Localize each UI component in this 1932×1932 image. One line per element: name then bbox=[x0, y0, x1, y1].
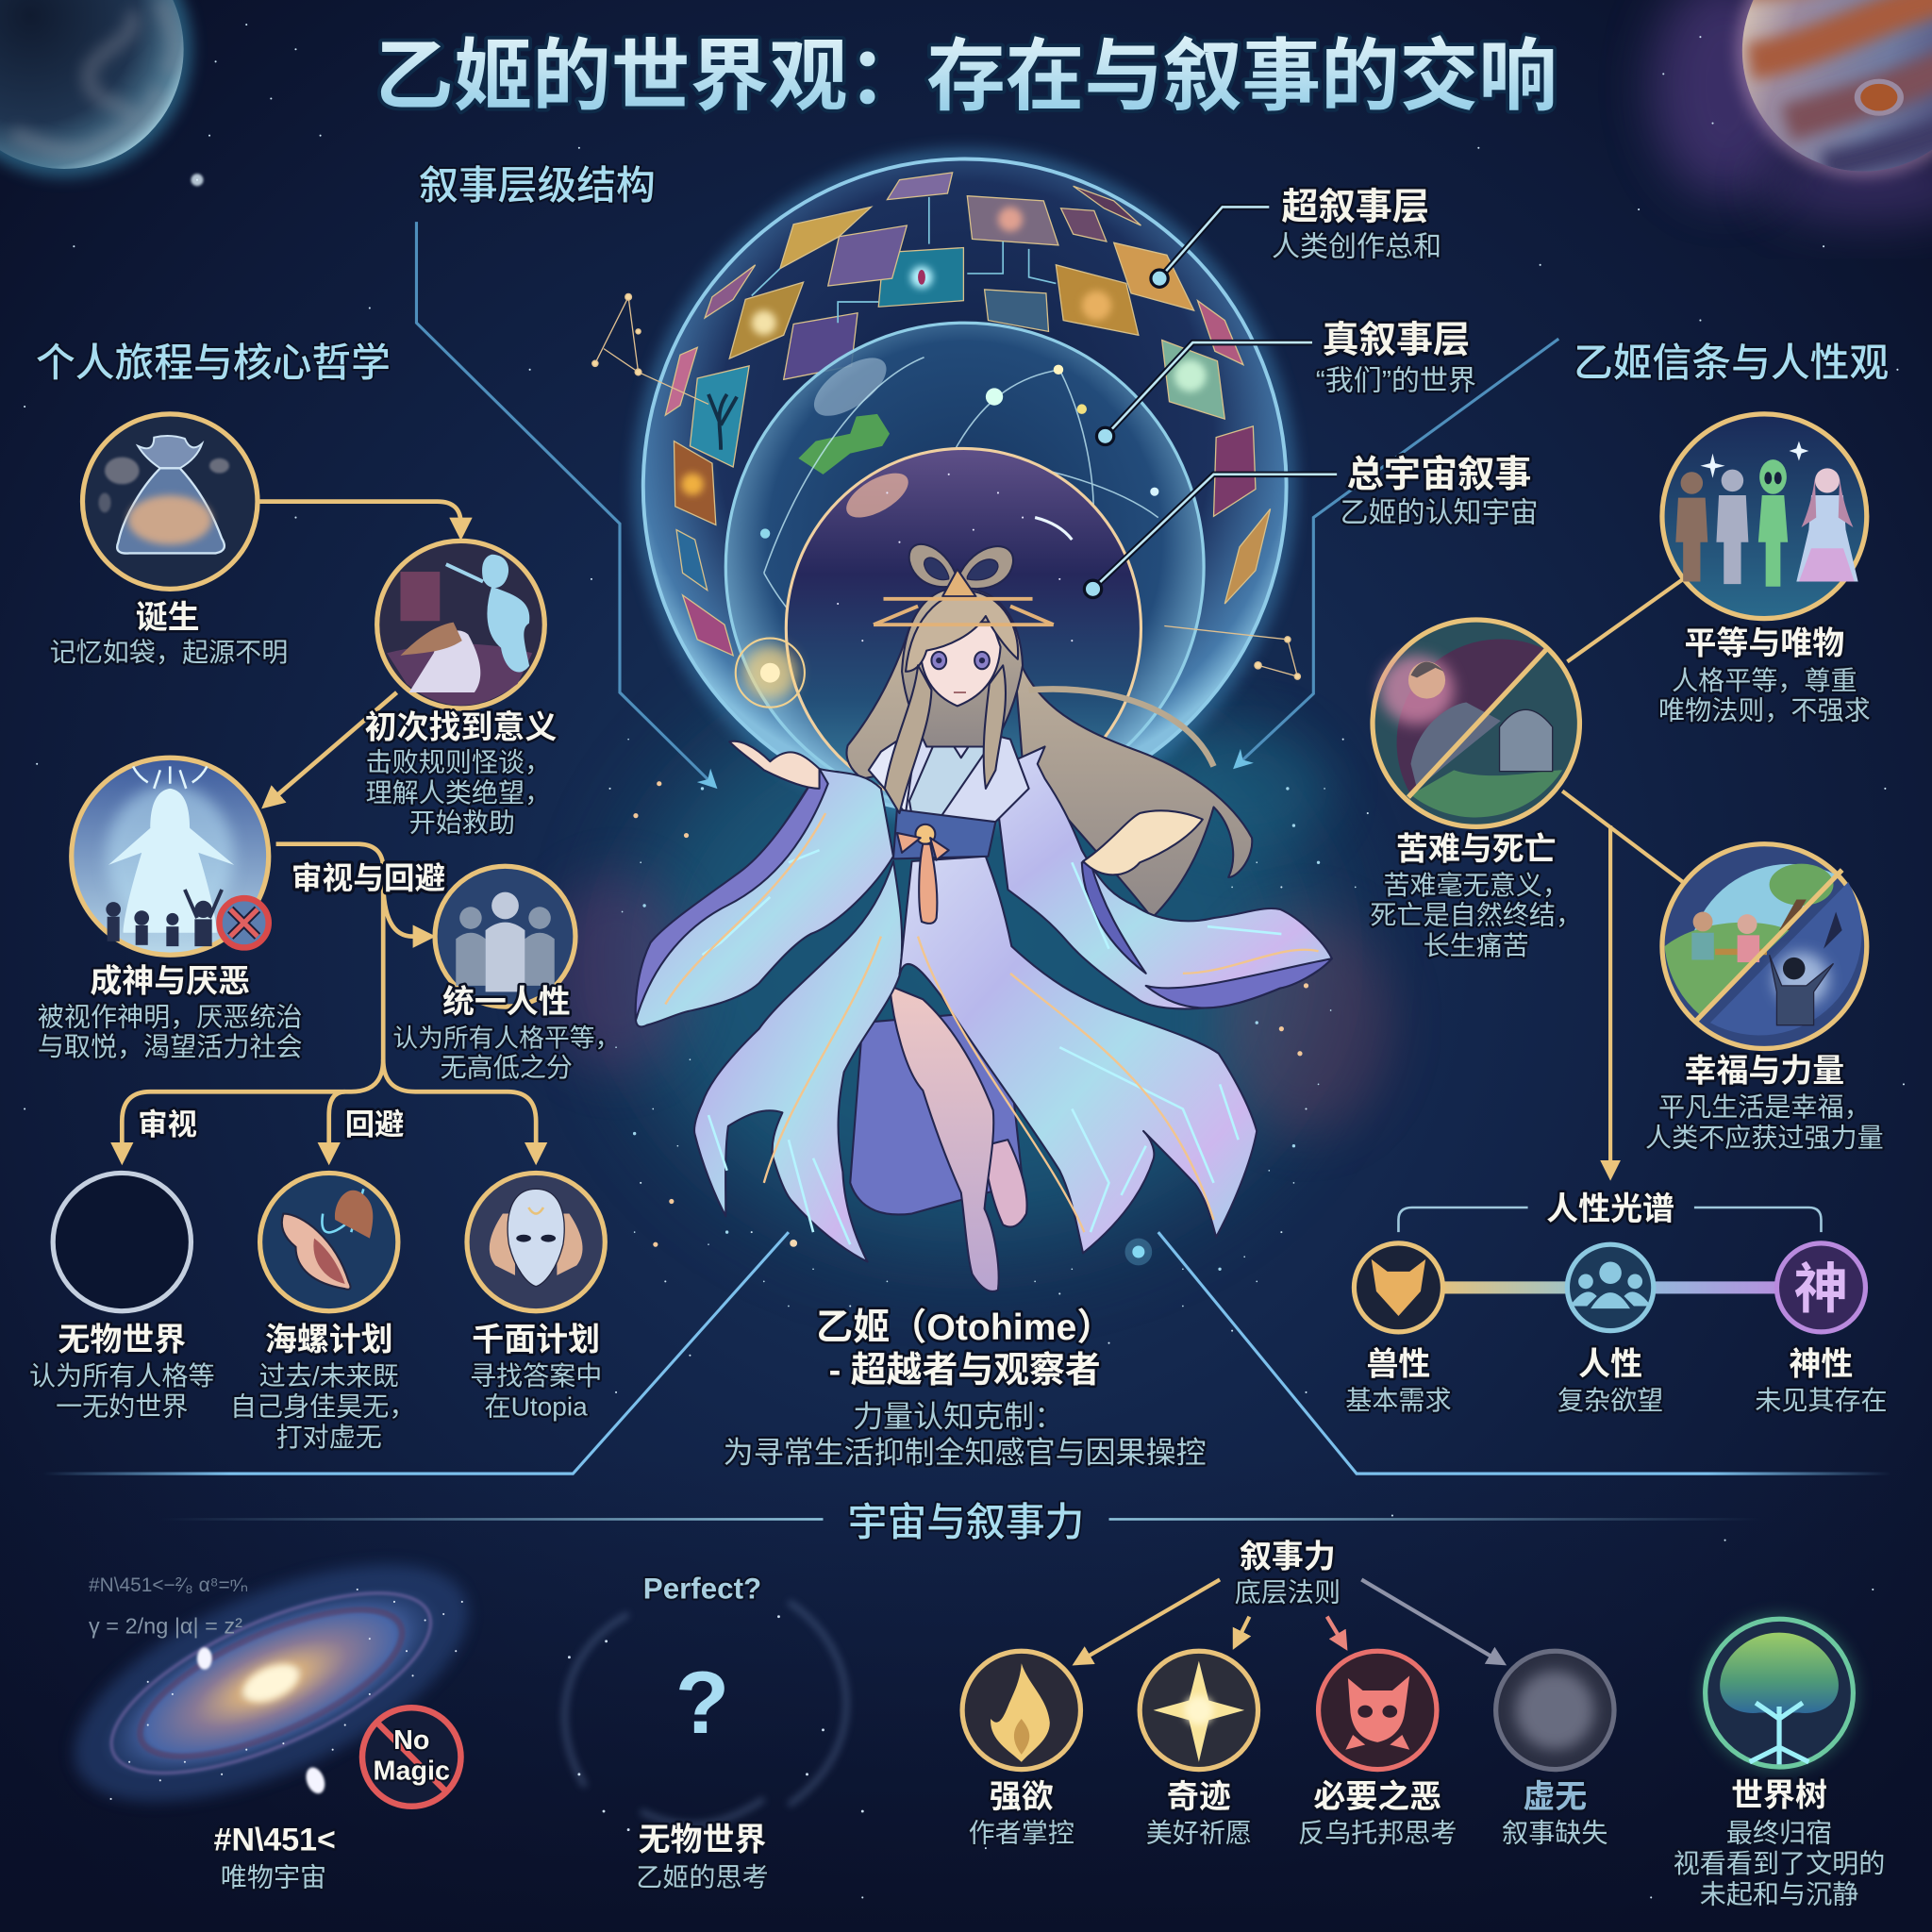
callout: meta narrative layer: 人类创作总和 bbox=[1272, 231, 1441, 262]
node: happiness and power bbox=[1645, 844, 1884, 1153]
node: deification and disgust bbox=[38, 758, 303, 1061]
node: unified humanity: 统一人性 bbox=[442, 985, 571, 1021]
panel: nothing world question: Perfect? bbox=[643, 1573, 761, 1606]
node: unified humanity: 无高低之分 bbox=[441, 1053, 573, 1082]
node: happiness and power: 平凡生活是幸福， bbox=[1658, 1092, 1871, 1122]
panel: nothing world question: ? bbox=[675, 1653, 729, 1752]
middle sphere: true narrative layer bbox=[725, 323, 1204, 810]
panel: narrative force: 叙事力 bbox=[1240, 1539, 1336, 1574]
node: unified humanity: 认为所有人格平等， bbox=[392, 1024, 620, 1052]
callout: true narrative layer: 真叙事层 bbox=[1322, 321, 1470, 361]
icon: beast nature: 兽性 bbox=[1367, 1347, 1430, 1383]
icon: human nature bbox=[1557, 1244, 1663, 1415]
panel: material universe galaxy: 唯物宇宙 bbox=[221, 1862, 326, 1891]
icon: divine nature bbox=[1755, 1243, 1888, 1415]
callout: total cosmic narrative: 乙姬的认知宇宙 bbox=[1340, 498, 1539, 528]
icon: necessary evil skull: 必要之恶 bbox=[1313, 1779, 1441, 1815]
back skirt bbox=[850, 1010, 1023, 1214]
planet: top-right banded gas giant bbox=[1736, 0, 1932, 177]
icon: human nature: 人性 bbox=[1578, 1347, 1642, 1383]
torso bbox=[897, 727, 1029, 824]
planet: top-left blue planet bbox=[0, 0, 192, 177]
node: conch plan: 过去/未来既 bbox=[259, 1361, 399, 1391]
glowing robe lines bbox=[702, 850, 1281, 1244]
icon: divine nature: 神 bbox=[1794, 1259, 1848, 1320]
callout: meta narrative layer: 超叙事层 bbox=[1281, 188, 1429, 228]
center caption: 乙姬（Otohime） bbox=[816, 1307, 1113, 1348]
humanity spectrum bbox=[1345, 1191, 1888, 1415]
callout: true narrative layer bbox=[1096, 321, 1476, 445]
icon: necessary evil skull: 反乌托邦思考 bbox=[1298, 1818, 1457, 1847]
node: happiness and power: 人类不应获过强力量 bbox=[1645, 1124, 1884, 1153]
node: birth: 记忆如袋，起源不明 bbox=[50, 638, 288, 667]
arrows: force to four branches bbox=[1075, 1579, 1503, 1663]
node: equality and materialism bbox=[1658, 414, 1871, 724]
node: thousand faces plan: 寻找答案中 bbox=[470, 1361, 602, 1391]
left sleeve bbox=[636, 769, 893, 1026]
sash bbox=[893, 809, 995, 858]
node: nothing world ring: 认为所有人格等 bbox=[29, 1361, 215, 1391]
node: unified humanity bbox=[392, 866, 620, 1082]
icon: necessary evil skull bbox=[1298, 1651, 1457, 1847]
node: equality and materialism: 唯物法则，不强求 bbox=[1658, 695, 1871, 724]
panel: material universe galaxy: #N\451< bbox=[214, 1823, 336, 1858]
icon: void: 叙事缺失 bbox=[1502, 1818, 1607, 1847]
nested narrative spheres bbox=[592, 148, 1300, 825]
arrow label: 审视与回避 bbox=[291, 860, 445, 895]
right robe panel bbox=[899, 857, 1257, 1253]
panel: nothing world question: 乙姬的思考 bbox=[636, 1862, 769, 1891]
heading: narrative layers: 叙事层级结构 bbox=[419, 163, 656, 208]
node: nothing world ring: 无物世界 bbox=[58, 1322, 186, 1357]
panel: personal journey: 审视 bbox=[138, 1108, 197, 1141]
connectors bbox=[1562, 579, 1683, 1176]
icon: void bbox=[1496, 1651, 1614, 1847]
humanity spectrum: 人性光谱 bbox=[1546, 1191, 1674, 1227]
node: thousand faces plan: 在Utopia bbox=[485, 1391, 588, 1421]
heading: journey: 个人旅程与核心哲学 bbox=[36, 341, 391, 385]
node: conch plan: 海螺计划 bbox=[265, 1322, 393, 1357]
node: happiness and power: 幸福与力量 bbox=[1685, 1054, 1844, 1090]
node: first meaning: 初次找到意义 bbox=[365, 709, 557, 745]
icon: miracle star bbox=[1140, 1651, 1258, 1847]
panel: beliefs and humanity bbox=[1345, 341, 1889, 1415]
central figure: Otohime bbox=[636, 544, 1332, 1291]
icon: divine nature: 未见其存在 bbox=[1755, 1386, 1888, 1415]
left robe panel bbox=[694, 861, 902, 1261]
node: deification and disgust: 成神与厌恶 bbox=[90, 963, 250, 999]
node: conch plan: 打对虚无 bbox=[276, 1423, 382, 1452]
icon: world tree bbox=[1674, 1613, 1885, 1909]
node: equality and materialism: 人格平等，尊重 bbox=[1672, 666, 1857, 695]
panel: nothing world question: 无物世界 bbox=[639, 1823, 766, 1858]
icon: beast nature: 基本需求 bbox=[1345, 1386, 1452, 1415]
panel: narrative force bbox=[962, 1539, 1885, 1909]
icon: no magic: Magic bbox=[374, 1757, 450, 1787]
constellation: left bbox=[592, 293, 708, 404]
node: suffering and death: 苦难毫无意义， bbox=[1383, 871, 1569, 900]
node: conch plan: 自己身佳昊无， bbox=[230, 1391, 415, 1421]
node: nothing world ring: 一无妁世界 bbox=[56, 1391, 189, 1421]
panel: narrative force: 底层法则 bbox=[1235, 1578, 1341, 1607]
callout: total cosmic narrative: 总宇宙叙事 bbox=[1347, 455, 1531, 495]
node: birth: 诞生 bbox=[136, 600, 200, 636]
node: suffering and death bbox=[1370, 620, 1582, 960]
flow arrows bbox=[122, 502, 536, 1160]
glowing orb bbox=[736, 639, 805, 708]
node: nothing world ring bbox=[29, 1173, 215, 1421]
icon: miracle star: 奇迹 bbox=[1167, 1779, 1231, 1815]
icon: world tree: 世界树 bbox=[1731, 1778, 1827, 1814]
panel: material universe galaxy: γ = 2/ng |α| = z² bbox=[89, 1613, 242, 1638]
panel: personal journey: 回避 bbox=[345, 1108, 404, 1141]
outer sphere: meta narrative layer bbox=[643, 158, 1287, 814]
icon: no magic: No bbox=[393, 1725, 429, 1756]
node: suffering and death: 死亡是自然终结， bbox=[1370, 900, 1582, 929]
icon: world tree: 最终归宿 bbox=[1726, 1818, 1832, 1847]
node: first meaning: 理解人类绝望， bbox=[366, 778, 551, 808]
node: deification and disgust: 被视作神明，厌恶统治 bbox=[38, 1003, 303, 1032]
panel: nothing world question bbox=[565, 1573, 862, 1891]
panel: material universe galaxy: #N\451<−²⁄₈ α⁸=ⁿ⁄ₙ bbox=[89, 1574, 248, 1596]
head and hair bbox=[902, 588, 1023, 747]
icon: strong desire flame: 作者掌控 bbox=[969, 1818, 1074, 1847]
frame lines: around central figure bbox=[43, 222, 1891, 1474]
icon: world tree: 未起和与沉静 bbox=[1700, 1880, 1858, 1909]
title: 乙姬的世界观：存在与叙事的交响 bbox=[375, 31, 1557, 120]
icon: strong desire flame: 强欲 bbox=[990, 1779, 1054, 1815]
icon: human nature: 复杂欲望 bbox=[1557, 1386, 1663, 1415]
icon: world tree: 视看看到了文明的 bbox=[1674, 1849, 1885, 1878]
icon: beast nature bbox=[1345, 1243, 1452, 1415]
node: deification and disgust: 与取悦，渴望活力社会 bbox=[38, 1032, 303, 1061]
galaxy bbox=[42, 1516, 501, 1850]
center caption: - 超越者与观察者 bbox=[829, 1351, 1101, 1391]
section divider: cosmos and narrative force: 宇宙与叙事力 bbox=[848, 1500, 1084, 1544]
panel: material universe galaxy bbox=[42, 1516, 501, 1891]
front hair strands bbox=[885, 665, 931, 813]
center caption bbox=[724, 1307, 1207, 1469]
node: birth bbox=[50, 414, 288, 667]
legs bbox=[983, 1140, 1027, 1227]
callout: meta narrative layer bbox=[1151, 188, 1441, 287]
callout: true narrative layer: “我们”的世界 bbox=[1316, 366, 1476, 397]
center caption: 为寻常生活抑制全知感官与因果操控 bbox=[724, 1435, 1207, 1469]
icon: miracle star: 美好祈愿 bbox=[1146, 1818, 1252, 1847]
node: suffering and death: 长生痛苦 bbox=[1424, 931, 1529, 960]
node: equality and materialism: 平等与唯物 bbox=[1685, 625, 1844, 661]
node: first meaning: 击败规则怪谈， bbox=[366, 747, 551, 776]
node: suffering and death: 苦难与死亡 bbox=[1396, 832, 1557, 868]
inner sphere: total cosmic narrative bbox=[786, 448, 1141, 808]
hands and shell bbox=[729, 741, 820, 789]
hair back bbox=[846, 628, 1252, 918]
hair ribbon and ornaments bbox=[909, 544, 1013, 589]
callout: total cosmic narrative bbox=[1084, 455, 1539, 597]
constellation: right bbox=[1164, 626, 1300, 679]
icon: no magic bbox=[362, 1707, 460, 1807]
icon: prohibition bbox=[219, 898, 269, 947]
panel: personal journey bbox=[29, 341, 620, 1452]
node: conch plan bbox=[230, 1173, 415, 1452]
heading: beliefs: 乙姬信条与人性观 bbox=[1574, 341, 1889, 385]
icon: void: 虚无 bbox=[1523, 1779, 1587, 1815]
icon: divine nature: 神性 bbox=[1790, 1347, 1853, 1383]
node: thousand faces plan: 千面计划 bbox=[472, 1322, 600, 1357]
icon: strong desire flame bbox=[962, 1651, 1080, 1847]
node: thousand faces plan bbox=[467, 1173, 605, 1421]
center caption: 力量认知克制： bbox=[853, 1399, 1064, 1433]
node: first meaning bbox=[365, 541, 557, 837]
node: first meaning: 开始救助 bbox=[409, 808, 515, 837]
right sleeve bbox=[993, 747, 1332, 1008]
